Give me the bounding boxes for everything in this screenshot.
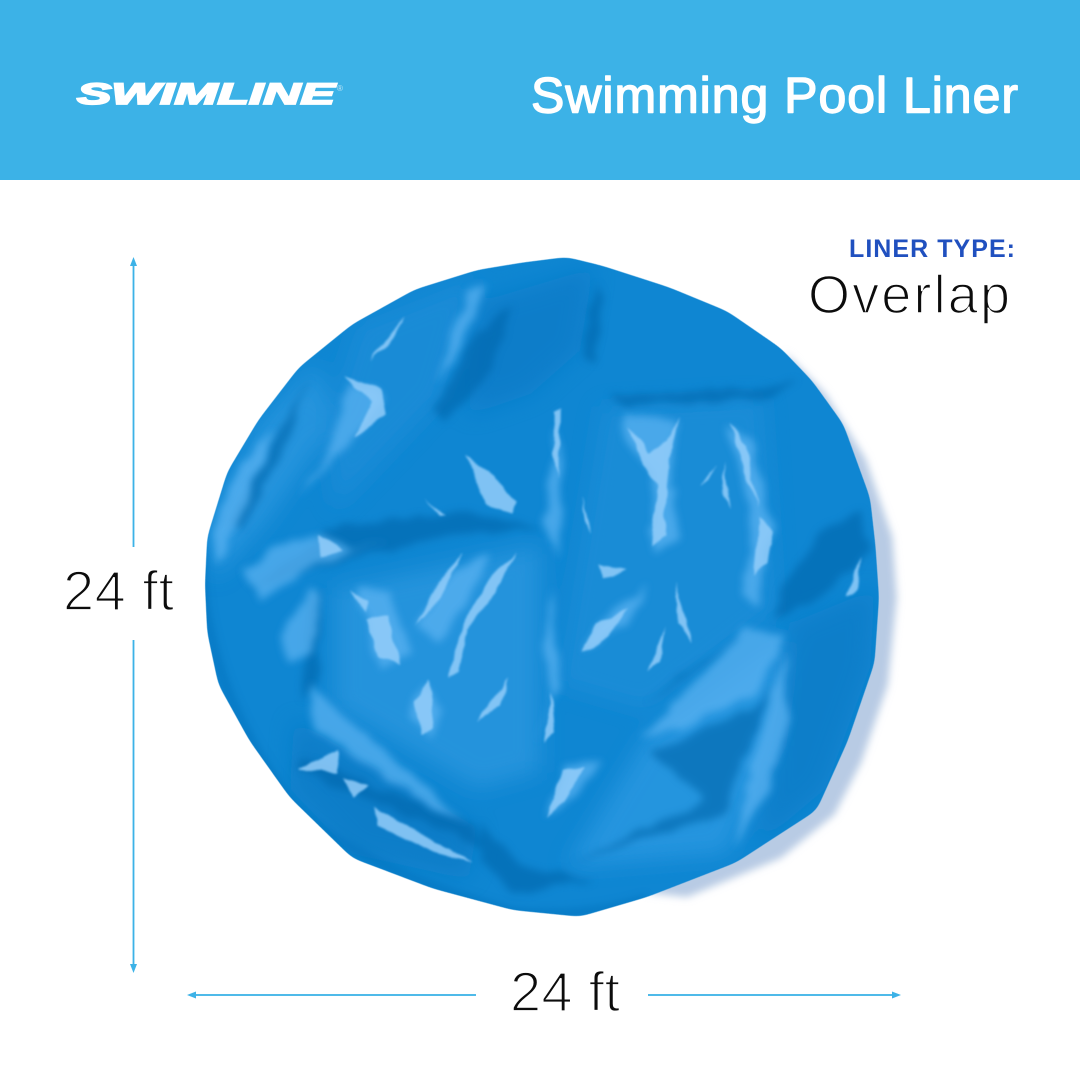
sharp crinkle highlights (298, 316, 862, 862)
header banner (0, 0, 1080, 180)
logo: Swimline: ® (337, 84, 343, 93)
liner type value: Overlap (808, 265, 1010, 325)
liner type label: LINER TYPE: (849, 235, 1015, 263)
broad tonal areas (209, 268, 875, 880)
logo: Swimline: SWIMLINE (77, 78, 337, 111)
horizontal dimension label: 24 ft (510, 960, 620, 1023)
liner base fill (204, 258, 879, 916)
dark folds (227, 281, 870, 893)
liner body (204, 258, 879, 916)
liner photo illustration (192, 242, 906, 936)
soft highlights (212, 283, 789, 845)
title: Swimming Pool Liner (531, 68, 1018, 124)
vertical dimension arrow (130, 257, 137, 973)
vertical dimension label: 24 ft (63, 559, 174, 622)
darker rim (200, 554, 647, 914)
horizontal dimension arrow (187, 992, 901, 998)
logo: Swimline (77, 78, 343, 111)
liner cast shadow (647, 352, 897, 897)
